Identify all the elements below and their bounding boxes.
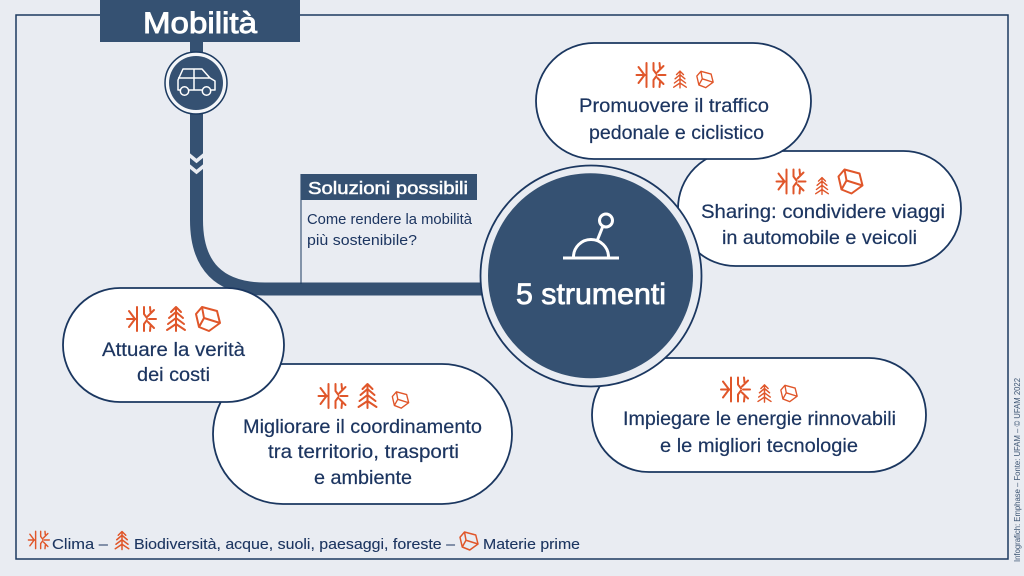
panel: soluzioni possibili: più sostenibile? (307, 233, 417, 249)
panel: coordinamento: Migliorare il coordinamento (243, 416, 482, 438)
panel: soluzioni possibili: Soluzioni possibili (308, 178, 468, 198)
panel: coordinamento: tra territorio, trasporti (268, 441, 459, 463)
panel: sharing: Sharing: condividere viaggi (701, 201, 945, 223)
icon: car (165, 52, 227, 114)
panel: soluzioni possibili: Come rendere la mobilità (307, 212, 473, 228)
title: Mobilità: Mobilità (143, 7, 257, 40)
central circle: 5 strumenti: 5 strumenti (516, 278, 666, 311)
panel: sharing (678, 151, 961, 266)
panel: energie rinnovabili: Impiegare le energie rinnovabili (623, 408, 896, 430)
title: Mobilità (100, 0, 300, 42)
icon: lever (563, 214, 619, 258)
legend (28, 531, 580, 553)
legend: Biodiversità, acque, suoli, paesaggi, foreste – (134, 536, 456, 553)
panel: traffico pedonale (536, 43, 811, 159)
legend: Clima – (52, 536, 109, 553)
legend: Materie prime (483, 536, 580, 553)
panel: verità dei costi (63, 288, 284, 402)
panel: verità dei costi: dei costi (137, 364, 210, 386)
panel: sharing: in automobile e veicoli (722, 227, 917, 249)
road line (196, 40, 490, 289)
chevrons (188, 154, 205, 172)
credit: Infografich: Emphase – Fonte: UFAM – © UFAM 2022 (1013, 377, 1022, 562)
central circle: 5 strumenti (480, 166, 702, 386)
panel: energie rinnovabili: e le migliori tecnologie (660, 435, 858, 457)
panel: coordinamento (213, 364, 512, 504)
panel: energie rinnovabili (592, 358, 926, 472)
panel: traffico pedonale: Promuovere il traffico (579, 95, 769, 117)
panel: soluzioni possibili (301, 174, 477, 284)
panel: verità dei costi: Attuare la verità (102, 339, 245, 361)
panel: coordinamento: e ambiente (314, 467, 412, 489)
panel: traffico pedonale: pedonale e ciclistico (589, 122, 764, 144)
